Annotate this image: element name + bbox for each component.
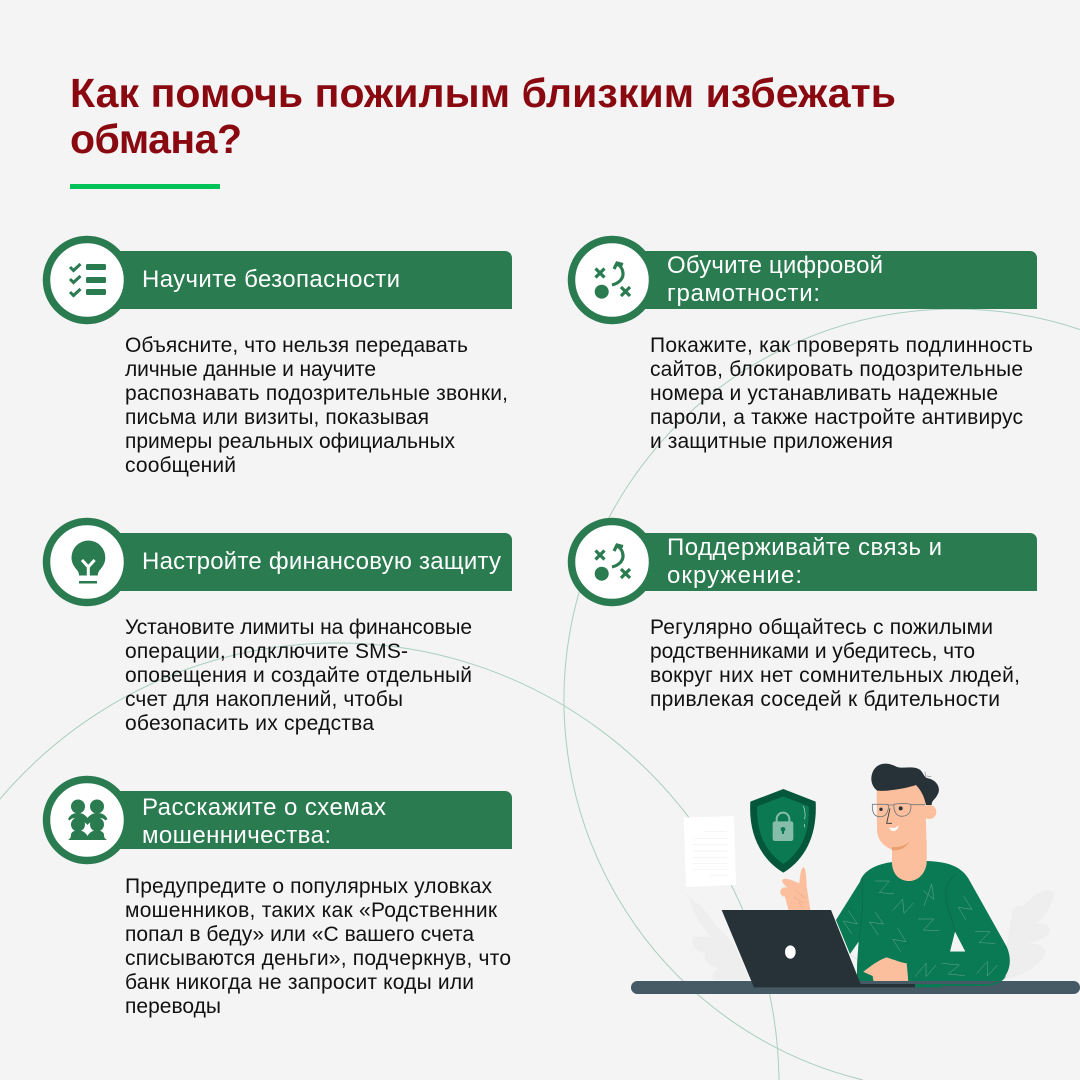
glasses (872, 804, 925, 817)
panel: financial protection (46, 522, 512, 735)
icon: strategy second (572, 522, 652, 602)
text block: keep in touch (650, 616, 1020, 711)
banner: financial protection (87, 533, 512, 591)
text block: digital literacy: и защитные приложения (650, 430, 893, 453)
banner: fraud schemes (87, 791, 512, 849)
text block: keep in touch: родственниками и убедитесь, что (650, 640, 975, 663)
text block: digital literacy: номера и устанавливать надежные (650, 382, 998, 405)
face (877, 780, 927, 850)
text block: digital literacy (650, 334, 1033, 453)
heading: financial protection: Настройте финансовую защиту (142, 548, 501, 575)
banner: digital literacy (612, 251, 1037, 309)
text block: financial protection: счет для накоплений, чтобы (125, 688, 403, 711)
heading: keep in touch (667, 534, 942, 589)
text block: teach safety (125, 334, 508, 477)
text block: teach safety: распознавать подозрительные звонки, (125, 382, 508, 405)
text block: fraud schemes (125, 875, 511, 1018)
heading: digital literacy: Обучите цифровой (667, 252, 883, 279)
heading: digital literacy: грамотности: (667, 280, 820, 307)
text block: fraud schemes: Предупредите о популярных уловках (125, 875, 492, 898)
text block: financial protection: обезопасить их средства (125, 712, 374, 735)
laptop (722, 910, 915, 987)
text block: teach safety: примеры реальных официальных (125, 430, 456, 453)
title: Как помочь пожилым близким избежать (70, 70, 896, 116)
icon: people (46, 780, 128, 860)
sleeve cuff over table (915, 975, 1006, 987)
shield with lock (750, 789, 816, 873)
title: обмана? (70, 116, 242, 162)
sweater (836, 861, 1010, 986)
text block: fraud schemes: банк никогда не запросит коды или (125, 971, 474, 994)
text block: financial protection (125, 616, 472, 735)
heading: keep in touch: окружение: (667, 562, 802, 589)
text block: teach safety: сообщений (125, 454, 236, 477)
neck (892, 840, 927, 881)
text block: financial protection: операции, подключите SMS- (125, 640, 408, 663)
illustration: man with laptop and shield (631, 764, 1080, 994)
heading: fraud schemes: Расскажите о схемах (142, 794, 386, 821)
icon: strategy (572, 240, 652, 320)
leaf right (1002, 890, 1054, 980)
hair (871, 764, 939, 805)
title (70, 70, 896, 162)
text block: fraud schemes: списываются деньги», подчеркнув, что (125, 947, 511, 970)
text block: keep in touch: Регулярно общайтесь с пожилыми (650, 616, 993, 639)
text block: fraud schemes: переводы (125, 995, 221, 1018)
text block: financial protection: оповещения и создайте отдельный (125, 664, 472, 687)
banner: teach safety (87, 251, 512, 309)
heading: keep in touch: Поддерживайте связь и (667, 534, 942, 561)
banner: keep in touch (612, 533, 1037, 591)
heading: digital literacy (667, 252, 883, 307)
sleeve (906, 952, 1009, 987)
text block: teach safety: письма или визиты, показывая (125, 406, 429, 429)
icon: light bulb (46, 522, 128, 602)
text block: fraud schemes: попал в беду» или «С вашего счета (125, 923, 474, 946)
panel: fraud schemes (46, 780, 512, 1018)
text block: digital literacy: пароли, а также настройте антивирус (650, 406, 1023, 429)
leaf left (685, 895, 750, 980)
table (631, 981, 1080, 994)
text block: digital literacy: Покажите, как проверять подлинность (650, 334, 1033, 357)
panel: digital literacy (572, 240, 1037, 453)
heading: fraud schemes: мошенничества: (142, 822, 331, 849)
text block: keep in touch: вокруг них нет сомнительных людей, (650, 664, 1020, 687)
sweater zigzags (843, 881, 995, 952)
text block: teach safety: личные данные и научите (125, 358, 376, 381)
panel: teach safety (46, 240, 512, 477)
heading: teach safety: Научите безопасности (142, 266, 400, 293)
title underline accent (70, 184, 220, 189)
heading: fraud schemes (142, 794, 386, 849)
text block: keep in touch: привлекая соседей к бдительности (650, 688, 1000, 711)
icon: checklist (46, 240, 128, 320)
man (836, 764, 1010, 987)
raised hand (780, 867, 810, 910)
text block: teach safety: Объясните, что нельзя передавать (125, 334, 468, 357)
ear (922, 805, 936, 819)
paper document (684, 816, 736, 887)
panel: keep in touch (572, 522, 1037, 711)
text block: fraud schemes: мошенников, таких как «Родственник (125, 899, 498, 922)
text block: financial protection: Установите лимиты на финансовые (125, 616, 472, 639)
text block: digital literacy: сайтов, блокировать подозрительные (650, 358, 1023, 381)
hand on keyboard (863, 957, 908, 982)
